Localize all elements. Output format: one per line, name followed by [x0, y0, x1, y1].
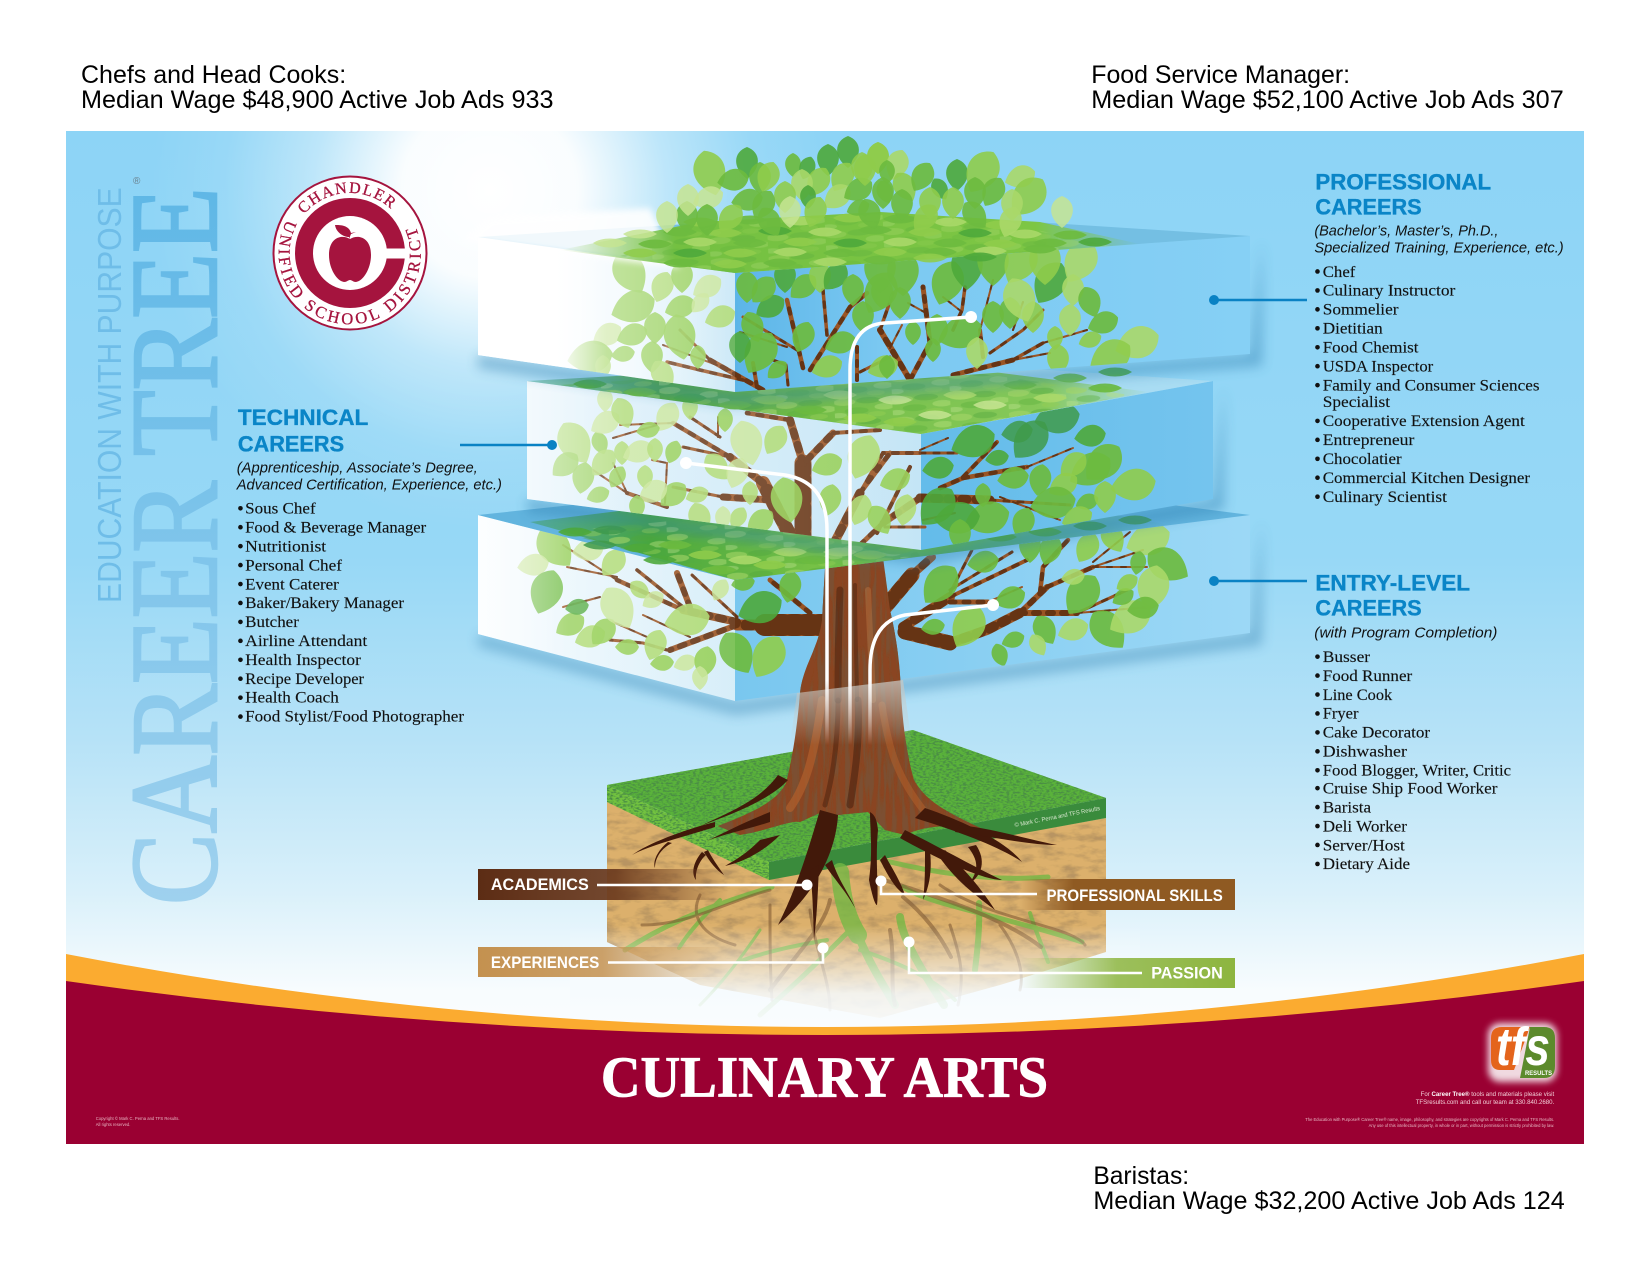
technical careers list: Food & Beverage Manager: [245, 517, 427, 536]
connector: technical careers: [686, 463, 827, 745]
panel: professional careers text: [1314, 169, 1564, 506]
heading: entry-level careers: [1315, 570, 1470, 621]
professional careers list: Family and Consumer Sciences: [1323, 375, 1540, 394]
green roots: [625, 860, 1082, 1015]
contact note: [1416, 1091, 1555, 1106]
professional careers list: Commercial Kitchen Designer: [1323, 468, 1531, 487]
label: academics: ACADEMICS: [491, 876, 589, 894]
professional careers list: Chocolatier: [1323, 449, 1402, 468]
label: passion: PASSION: [1151, 965, 1223, 983]
professional requirements note: (Bachelor’s, Master’s, Ph.D.,: [1314, 224, 1498, 240]
soil: [607, 800, 1106, 1018]
mid slab surface leaves: [573, 368, 1132, 426]
main title: culinary arts: CULINARY ARTS: [601, 1044, 1048, 1109]
technical careers list: Recipe Developer: [245, 669, 365, 688]
heading: professional careers: [1315, 169, 1491, 220]
wage note: food service manager: [1091, 62, 1564, 114]
technical careers list: Sous Chef: [245, 499, 316, 518]
bottom slab leaves: [515, 517, 1196, 690]
professional careers list: Dietitian: [1323, 319, 1383, 338]
contact note: TFSresults.com and call our team at 330.840.2680.: [1416, 1099, 1555, 1106]
ghost brown roots: [642, 877, 1085, 1010]
professional careers list: Cooperative Extension Agent: [1323, 411, 1525, 430]
technical careers list: Butcher: [245, 612, 299, 631]
connector: entry-level careers: [870, 605, 993, 745]
wage note: baristas: Baristas:: [1093, 1163, 1189, 1190]
wage note: food service manager: Median Wage $52,100 Active Job Ads 307: [1091, 87, 1564, 114]
canopy leaves above top slab: [656, 136, 1073, 241]
entry-level careers list: [1315, 647, 1511, 873]
technical requirements note: Advanced Certification, Experience, etc.): [236, 477, 502, 493]
copyright note right: Any use of this intellectual property, in whole or in part, without permission is strictly prohibited by law.: [1369, 1123, 1554, 1128]
professional requirements note: Specialized Training, Experience, etc.): [1314, 241, 1564, 257]
label: experiences: EXPERIENCES: [491, 954, 599, 972]
blue connector: entry-level careers: [1209, 576, 1307, 586]
top slab wash: [478, 237, 735, 392]
technical careers list: Nutritionist: [245, 536, 327, 555]
logo apple: [329, 237, 371, 282]
technical careers list: [238, 499, 465, 725]
label: professional skills: PROFESSIONAL SKILLS: [1047, 887, 1223, 905]
label: academics: [478, 869, 812, 900]
technical careers list: Event Caterer: [245, 574, 339, 593]
canopy surface leaves: [593, 214, 1112, 268]
mid slab branches: [593, 413, 1073, 555]
logo: chandler unified school district: [272, 176, 428, 330]
mid slab top face: [528, 370, 1212, 434]
bottom slab wash: [478, 515, 735, 701]
sky background: [66, 131, 1584, 988]
entry-level requirements note: (with Program Completion): [1314, 626, 1498, 642]
heading: technical careers: CAREERS: [238, 431, 344, 456]
professional careers list: Entrepreneur: [1323, 430, 1415, 449]
logo slot: [386, 248, 405, 258]
panel: entry-level careers text: [1314, 570, 1511, 873]
professional careers list: Culinary Instructor: [1323, 281, 1456, 300]
entry-level careers list: Deli Worker: [1323, 816, 1408, 835]
copyright note right: [1305, 1117, 1554, 1128]
ground block: [607, 730, 1106, 1018]
connector: professional careers: [850, 317, 971, 745]
professional careers list: USDA Inspector: [1323, 356, 1434, 375]
entry-level careers list: Cruise Ship Food Worker: [1323, 778, 1498, 797]
soil fade: [607, 928, 1106, 1018]
top slab top face: [478, 212, 1250, 273]
vertical title: career tree: CAREER TREE: [105, 187, 243, 905]
canopy surface: [560, 212, 1140, 273]
heading: entry-level careers: CAREERS: [1315, 596, 1422, 621]
entry-level careers list: Busser: [1323, 647, 1371, 666]
technical careers list: Food Stylist/Food Photographer: [245, 706, 465, 725]
blue connector: professional careers: [1209, 295, 1307, 305]
heading: professional careers: PROFESSIONAL: [1315, 169, 1491, 194]
surface roots: [632, 775, 1057, 940]
top slab shadow: [478, 240, 1262, 406]
logo: tfs results: tfs: [1496, 1017, 1550, 1077]
bottom slab branches: [563, 532, 1150, 650]
entry-level careers list: Server/Host: [1323, 835, 1405, 854]
poster panel: [66, 131, 1584, 1144]
contact note: For Career Tree® tools and materials please visit: [1421, 1091, 1555, 1098]
technical careers list: Health Coach: [245, 687, 339, 706]
label: passion: [904, 936, 1235, 988]
professional careers list: Specialist: [1323, 392, 1391, 411]
bottom slab surface leaves: [558, 516, 1152, 574]
heading: entry-level careers: ENTRY-LEVEL: [1315, 570, 1470, 595]
blue connector: technical careers: [460, 440, 557, 450]
label: professional skills: [876, 876, 1235, 910]
professional careers list: Sommelier: [1323, 300, 1399, 319]
heading: technical careers: [238, 405, 368, 456]
wage note: chefs and head cooks: Median Wage $48,900 Active Job Ads 933: [81, 87, 554, 114]
lower grass note: © Mark C. Perna and TFS Results: [1014, 805, 1101, 829]
mid slab: technical careers: [527, 360, 1213, 555]
entry-level careers list: Dishwasher: [1323, 742, 1408, 761]
copyright note right: The Education with Purpose® Career Tree® name, image, philosophy, and strategies are copyrights of Mark C. Perna and TFS Results.: [1305, 1117, 1554, 1122]
copyright note left: [96, 1116, 180, 1127]
copyright note left: Copyright © Mark C. Perna and TFS Results.: [96, 1116, 180, 1121]
bottom slab: entry-level careers: [478, 470, 1250, 835]
crimson base band: [66, 981, 1584, 1144]
trunk shade band: [790, 680, 912, 745]
technical careers list: Personal Chef: [245, 555, 343, 574]
technical careers list: Health Inspector: [245, 650, 362, 669]
heading: professional careers: CAREERS: [1315, 195, 1422, 220]
logo text bottom: UNIFIED SCHOOL DISTRICT: [278, 222, 421, 324]
wage note: baristas: [1093, 1163, 1565, 1215]
top slab branches: [663, 280, 1087, 390]
entry-level careers list: Line Cook: [1323, 685, 1393, 704]
technical careers list: Baker/Bakery Manager: [245, 593, 405, 612]
orange swoosh: [66, 954, 1584, 1144]
trunk: [718, 550, 985, 835]
professional careers list: Culinary Scientist: [1323, 487, 1447, 506]
logo text top: CHANDLER: [298, 182, 395, 212]
wage note: chefs and head cooks: Chefs and Head Cooks:: [81, 62, 346, 89]
connector dot: entry-level careers: [987, 599, 999, 611]
professional requirements note: [1314, 224, 1564, 257]
professional careers list: Chef: [1323, 262, 1356, 281]
technical careers list: Airline Attendant: [245, 631, 368, 650]
grass right edge: [769, 798, 1106, 880]
entry-level careers list: Barista: [1323, 797, 1372, 816]
technical requirements note: [236, 460, 502, 493]
bottom slab shadow: [474, 549, 1268, 720]
label: experiences: [478, 942, 828, 977]
top slab leaves: [565, 234, 1164, 394]
wage note: food service manager: Food Service Manager:: [1091, 62, 1350, 89]
wage note: chefs and head cooks: [81, 62, 554, 114]
mid slab leaves: [546, 388, 1158, 551]
vertical subtitle: education with purpose: EDUCATION WITH PURPOSE: [92, 187, 129, 603]
grass left edge: [607, 785, 769, 880]
connector dot: technical careers: [680, 457, 692, 469]
copyright note left: All rights reserved.: [96, 1122, 130, 1127]
entry-level careers list: Dietary Aide: [1323, 854, 1410, 873]
top slab: professional careers: [462, 136, 1250, 394]
entry-level careers list: Cake Decorator: [1323, 723, 1431, 742]
grass top: [607, 730, 1106, 862]
bottom slab top face: [478, 505, 1250, 580]
wage note: baristas: Median Wage $32,200 Active Job Ads 124: [1093, 1188, 1565, 1215]
registered mark: ®: [133, 176, 141, 187]
panel: technical careers text: [236, 405, 502, 725]
professional careers list: Food Chemist: [1323, 338, 1419, 357]
technical requirements note: (Apprenticeship, Associate’s Degree,: [237, 460, 478, 476]
professional careers list: [1315, 262, 1540, 506]
entry-level careers list: Food Runner: [1323, 666, 1413, 685]
mid slab shadow: [522, 412, 1230, 571]
entry-level careers list: Food Blogger, Writer, Critic: [1323, 761, 1511, 780]
mid slab wash: [527, 381, 921, 550]
connector dot: professional careers: [965, 311, 977, 323]
heading: technical careers: TECHNICAL: [238, 405, 368, 430]
entry-level careers list: Fryer: [1323, 704, 1359, 723]
logo apple leaf: [335, 225, 356, 239]
trunk highlights: [790, 585, 925, 812]
sun glow: [206, 131, 774, 470]
logo: tfs results: RESULTS: [1525, 1070, 1553, 1077]
